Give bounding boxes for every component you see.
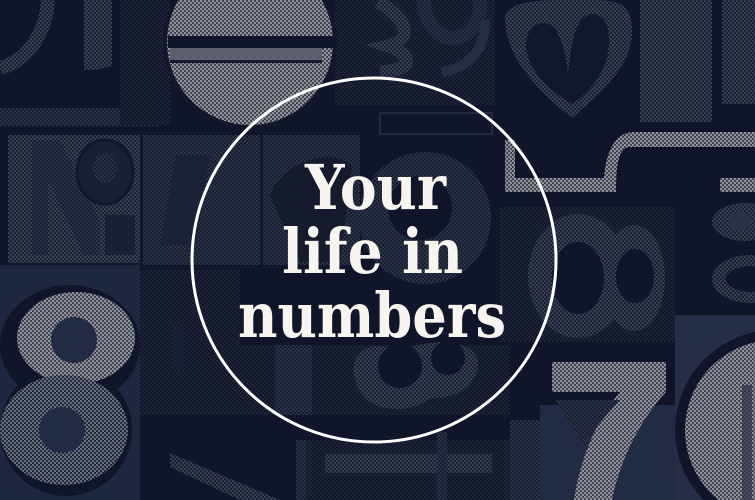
- numeral: far-right 8: [712, 203, 755, 303]
- numeral: 7 bottom-right: [552, 362, 666, 500]
- title: numbers: [238, 279, 506, 352]
- icon: screw head: [163, 0, 337, 129]
- numeral: top heart-shaped 3: [505, 0, 632, 118]
- numeral: top-left 0 and 1: [0, 0, 112, 70]
- numeral: large 8 bottom-left: [0, 285, 140, 496]
- numerals: top 3 and 9: [378, 0, 485, 72]
- bar: dark slug: [380, 113, 492, 134]
- numeral: top-right block: [712, 0, 755, 118]
- numeral: faint 9 behind title: [359, 152, 491, 284]
- numeral: large circle bottom-right: [675, 332, 755, 500]
- numerals: N 9 row: [32, 140, 352, 262]
- title: life in: [282, 215, 463, 288]
- numerals: faint centre type: [170, 325, 492, 500]
- numeral: mid-right 8: [528, 214, 665, 338]
- title: [238, 151, 506, 352]
- title: Your: [304, 151, 447, 224]
- numeral: large outlined corner band: [505, 132, 755, 192]
- ring: white circle: [192, 78, 556, 442]
